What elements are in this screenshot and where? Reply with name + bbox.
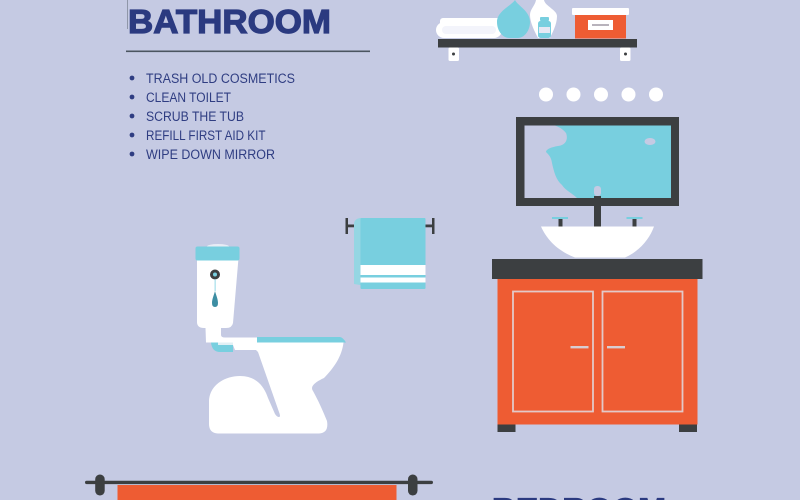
icon: small bottle (538, 17, 551, 38)
vanity lights (539, 88, 663, 102)
sink with faucet (541, 186, 654, 258)
shelf board (438, 39, 637, 48)
towel front (360, 218, 426, 289)
tank (197, 258, 238, 328)
countertop (492, 259, 702, 279)
pipe connector (211, 342, 233, 352)
left door (513, 292, 593, 412)
icon: folded towels (436, 18, 502, 38)
curtain rod and bed headboard (85, 474, 433, 500)
mirror (516, 117, 679, 206)
rod stop left (95, 474, 105, 496)
tank lid (196, 244, 240, 260)
cabinet feet (498, 424, 697, 432)
heading: bathroom: BATHROOM (128, 4, 331, 41)
heading divider (126, 50, 370, 52)
checklist: bathroom tasks: REFILL FIRST AID KIT (146, 128, 266, 143)
cabinet body (498, 279, 698, 424)
shelf bracket left (448, 48, 459, 61)
towel stripes (360, 265, 426, 282)
right door (602, 292, 682, 412)
checklist: bathroom tasks: TRASH OLD COSMETICS (146, 71, 295, 86)
checklist: bathroom tasks: CLEAN TOILET (146, 90, 231, 105)
basin (541, 226, 654, 258)
shelf with towels, vases and box (436, 0, 637, 61)
checklist: bathroom tasks (130, 71, 295, 162)
shelf bracket right (620, 48, 630, 61)
flush button and drop (210, 270, 220, 307)
faucet (594, 186, 601, 228)
icon: teal vase (497, 0, 530, 38)
tap right (626, 217, 642, 228)
rod stop right (408, 474, 418, 496)
rod (85, 481, 433, 484)
towel back fold (354, 218, 425, 285)
seat lid (257, 337, 346, 342)
toilet (196, 244, 346, 434)
towel on rail (346, 218, 434, 289)
bowl and base (209, 342, 344, 434)
headboard panel (118, 485, 396, 500)
flush pipe (206, 328, 260, 342)
vanity cabinet (492, 259, 702, 432)
tap left (552, 217, 568, 228)
towel rail (346, 218, 434, 234)
icon: storage box (572, 8, 629, 38)
checklist: bathroom tasks: SCRUB THE TUB (146, 109, 244, 124)
checklist: bathroom tasks: WIPE DOWN MIRROR (146, 147, 275, 162)
icon: white vase (530, 0, 557, 38)
